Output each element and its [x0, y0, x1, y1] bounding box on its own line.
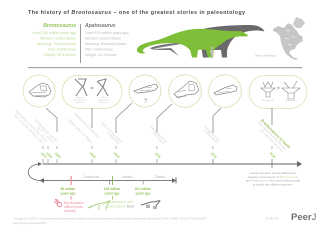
map: sites of findings — [255, 17, 305, 60]
rotated history notes: Apatosaurus named by Marsh — [14, 109, 48, 143]
marker: 66 million years ago — [61, 176, 75, 200]
footer citation: https://peerj.com/articles/857 — [13, 221, 47, 225]
extinction note — [64, 201, 84, 213]
year labels: 1877 — [40, 151, 48, 159]
upper ticks — [43, 146, 272, 164]
map: sites of findings: Sites of findings — [255, 54, 277, 58]
panel: Apatosaurus facts: Apatosaurus — [84, 23, 116, 29]
year labels: 1915 — [113, 151, 121, 159]
rotated history notes: New analysis finds the two — [257, 120, 287, 151]
callout: vertebrae pill: Apatosaurus — [285, 99, 297, 102]
rotated history notes: Complete skull — [203, 125, 221, 143]
panel: Brontosaurus facts: Meaning: Thunder lizard — [37, 42, 76, 46]
callout: pieces pill: also found — [100, 102, 108, 104]
callout: pieces pill: Brontosaurus — [74, 98, 86, 102]
title: The history of Brontosaurus – one of the greatest stories in paleontology — [28, 10, 246, 16]
rotated history notes: by O. C. Marsh — [37, 126, 55, 144]
panel: Brontosaurus facts: Weight: 30.5 tonnes — [44, 53, 76, 57]
year labels: 1883 — [54, 151, 62, 159]
lived note — [106, 200, 134, 208]
panel: Apatosaurus facts: Meaning: Deceptive lizard — [85, 42, 126, 46]
callout: skull circle 5 — [209, 75, 241, 133]
rotated history notes: Brontosaurus named — [34, 118, 58, 143]
period labels: Cretaceous — [83, 175, 100, 179]
panel: Apatosaurus facts: Diet: Herbivorous — [85, 48, 113, 52]
lived note: Brontosaurus lived — [106, 204, 134, 208]
callout: unknown skull circle: ? — [144, 99, 148, 105]
callout: pieces pill: Apatosaurus — [99, 98, 109, 102]
panel: Brontosaurus facts: Brontosaurus — [43, 23, 76, 29]
illustration: dinosaurs — [137, 25, 264, 58]
panel: Brontosaurus facts: Diet: Herbivorous — [48, 48, 76, 52]
panel: Apatosaurus facts — [84, 23, 129, 57]
callout: skull circle 4 — [157, 75, 201, 133]
panel: Apatosaurus facts: Weight: 41.3 tonnes — [85, 53, 117, 57]
rotated history notes — [13, 109, 291, 152]
callout: vertebrae pill: ≠ — [277, 86, 280, 92]
icon: human scale — [210, 47, 214, 58]
panel: Apatosaurus facts: Lived 150 million years ago — [85, 31, 129, 35]
year labels: 1879 — [45, 151, 53, 159]
latest research text: between specimens of Brontosaurus — [248, 175, 298, 179]
rotated history notes: the mount — [152, 132, 165, 145]
year labels — [40, 151, 277, 159]
marker: 145 million years ago — [104, 176, 120, 200]
callout: pieces pill: Piece of — [101, 97, 108, 99]
marker: 66 million years ago: years ago — [61, 192, 75, 196]
panel: Apatosaurus facts: Western United States — [85, 36, 121, 40]
callout: Brontosaurus skull circle — [23, 75, 57, 132]
extinction note: extinct (birds — [64, 205, 83, 209]
extinction note: Big dinosaurs — [64, 201, 84, 205]
icon: asteroid — [54, 199, 62, 207]
year labels: 1975 — [154, 151, 162, 159]
rotated history notes: Apatosaurus by Riggs — [67, 118, 93, 144]
rotated history notes: Brontosaurus sunk into — [73, 112, 100, 139]
latest research text: and Apatosaurus are numerous enough — [246, 179, 300, 183]
panel: Brontosaurus facts: Lived 150 million years ago — [32, 31, 76, 35]
year labels: 2015 — [269, 151, 277, 159]
callout: unknown skull circle — [116, 75, 161, 133]
footer citation: Tschopp et al. (2015), A specimen-level phylogenetic analysis and taxonomic revision of Diplodocidae (Dinosauria, Sauropoda). PeerJ 3:e857; DOI 10.7717/peerj.857 — [13, 216, 207, 220]
callout: pieces pill: Piece of — [77, 97, 84, 99]
year labels: 1903 — [89, 151, 97, 159]
marker: 201 million years ago — [135, 180, 151, 196]
rotated history notes: is mounted — [106, 130, 120, 145]
rotated history notes: is described — [203, 128, 218, 144]
extinction note: survive) — [64, 209, 76, 213]
callout: vertebrae pill: Brontosaurus — [262, 99, 274, 102]
icon: green sauropod — [88, 201, 110, 210]
period labels: Jurassic — [121, 175, 133, 179]
marker: 66 million years ago: 66 million — [61, 187, 75, 191]
rotated history notes: from a partial skeleton, Yale — [13, 113, 45, 145]
rotated history notes: are separate genera — [259, 128, 283, 152]
latest research text: Latest research shows differences — [250, 171, 297, 175]
timeline: recent — [43, 159, 302, 168]
panel: Brontosaurus facts: Western United States — [40, 36, 76, 40]
rotated history notes: Brontosaurus is back! — [260, 119, 291, 150]
callout: pieces pill — [62, 75, 122, 128]
callout: pieces pill: also found — [76, 102, 84, 104]
callout: pieces pill: = — [90, 86, 94, 92]
period labels — [83, 175, 166, 179]
footer citation — [13, 216, 207, 225]
callout: vertebrae pill — [249, 75, 307, 125]
icon: dark sauropod — [141, 201, 160, 209]
latest research text: to justify two different genera. — [253, 182, 293, 186]
timeline: deep time — [28, 162, 176, 184]
latest research text — [246, 171, 300, 186]
marker: 145 million years ago: 145 million — [104, 187, 120, 191]
logo: PeerJ — [291, 212, 317, 223]
period labels: Triassic — [155, 175, 166, 179]
rotated history notes: Skull placed on — [149, 125, 168, 144]
year labels: 1978 — [210, 151, 218, 159]
rotated history notes: Skull reconstruction — [100, 121, 123, 144]
panel: Brontosaurus facts — [32, 23, 76, 57]
marker: 145 million years ago: years ago — [105, 192, 119, 196]
lived note: Apatosaurus and — [108, 200, 133, 204]
license: CC BY 4.0 — [265, 216, 279, 220]
marker: 201 million years ago: years ago — [136, 192, 150, 196]
marker: 201 million years ago: 201 million — [135, 187, 151, 191]
